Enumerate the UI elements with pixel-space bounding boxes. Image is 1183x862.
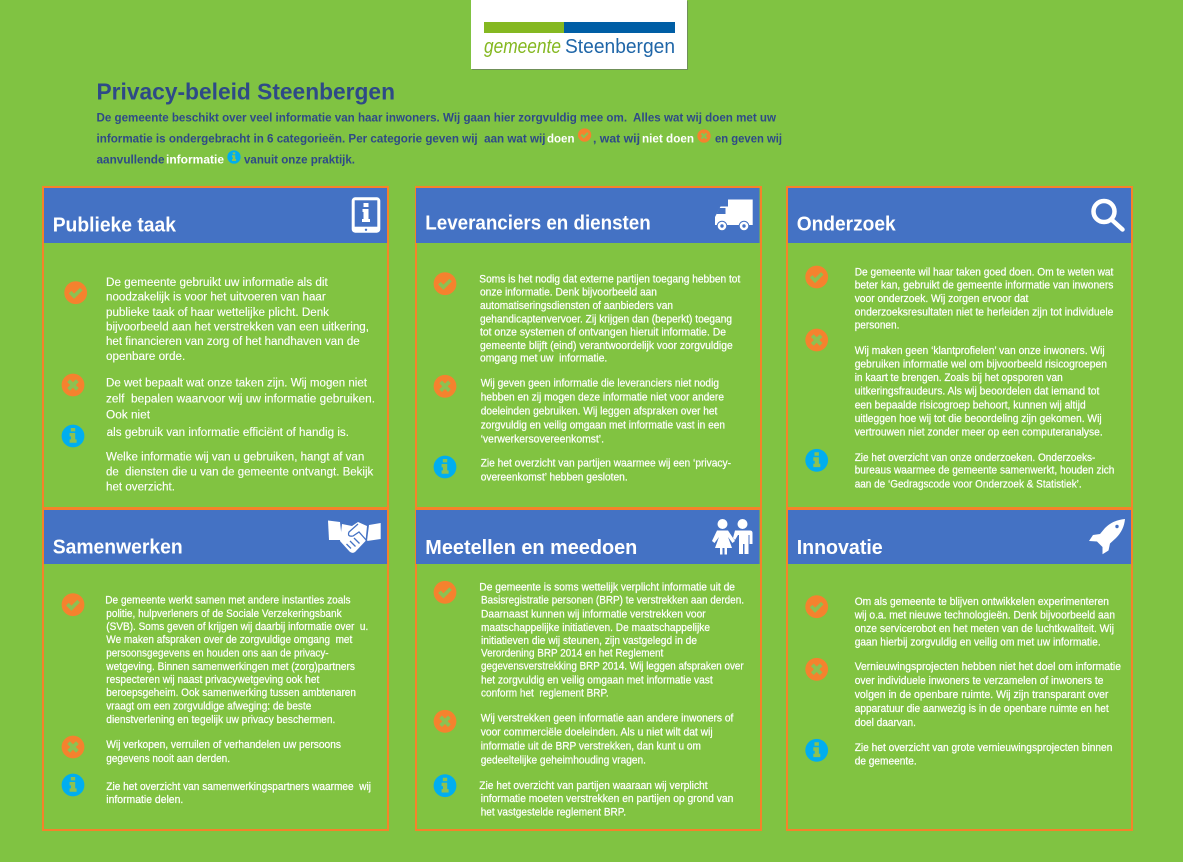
intro text: en geven wij: [715, 132, 782, 146]
text: what we do: De gemeente is soms wettelijk verplicht informatie uit de: [479, 582, 735, 594]
heading: Publieke taak: Publieke taak: [53, 214, 177, 237]
text: information: Zie het overzicht van samenwerkingspartners waarmee wij: [106, 781, 371, 793]
icon: cross: [62, 736, 84, 758]
icon: check: [434, 272, 456, 295]
text: what we do: respecteren wij naast privacywetgeving ook het: [106, 674, 319, 686]
logo card: Steenbergen: [565, 36, 675, 58]
text: information: overeenkomst’ hebben gesloten.: [481, 472, 628, 484]
text: information: [106, 452, 374, 494]
text: information: [106, 781, 371, 806]
text: what we do: gehandicaptenvervoer. Zij krijgen dan (beperkt) toegang: [480, 313, 732, 325]
panel: Meetellen en meedoen: [416, 509, 761, 830]
text: what we do: onze servicerobot en het meten van de luchtkwaliteit. Wij: [855, 623, 1114, 635]
text: what we do: openbare orde.: [106, 351, 185, 363]
panel: Samenwerken: [43, 509, 388, 830]
intro text: vanuit onze praktijk.: [244, 153, 355, 167]
text: information: Zie het overzicht van grote vernieuwingsprojecten binnen: [855, 742, 1112, 754]
text: what we do: De gemeente werkt samen met andere instanties zoals: [105, 595, 351, 607]
text: what we do: voor onderzoek. Wij zorgen ervoor dat: [855, 293, 1028, 305]
icon: cross: [805, 658, 828, 681]
icon: people: [712, 519, 752, 554]
text: what we do not do: uitleggen hoe wij tot die beoordeling zijn gekomen. Wij: [855, 413, 1102, 425]
text: what we do: (SVB). Soms geven of krijgen wij daarbij informatie over u.: [106, 621, 368, 633]
text: what we do: [106, 277, 369, 363]
text: what we do: wetgeving. Binnen samenwerkingen met (zorg)partners: [105, 661, 355, 673]
text: what we do: vraagt om een zorgvuldige afweging: de beste: [106, 700, 311, 712]
intro text: informatie is ondergebracht in 6 categorieën. Per categorie geven wij aan wat wij: [96, 132, 546, 146]
text: what we do: De gemeente gebruikt uw informatie als dit: [106, 277, 329, 289]
icon: info: [62, 425, 84, 447]
icon: tablet info: [352, 197, 380, 233]
icon: info: [805, 739, 828, 762]
icon: info: [434, 774, 456, 797]
text: what we do not do: als gebruik van informatie efficiënt of handig is.: [107, 427, 349, 439]
text: information: het vastgestelde reglement BRP.: [481, 807, 626, 819]
text: what we do: Basisregistratie personen (BRP) te verstrekken aan derden.: [481, 595, 744, 607]
text: information: [855, 452, 1115, 491]
text: what we do: beroepsgeheim. Ook samenwerking tussen ambtenaren: [106, 687, 356, 699]
text: what we do not do: in kaart te brengen. Zoals bij het opsporen van: [855, 372, 1063, 384]
icon: truck: [715, 200, 753, 231]
text: what we do not do: [855, 345, 1107, 439]
text: what we do not do: over individuele inwoners te verzamelen of inwoners te: [855, 675, 1104, 687]
text: information: informatie delen.: [106, 794, 183, 806]
panel: Innovatie: [787, 509, 1132, 830]
text: what we do not do: hebben en zij mogen deze informatie niet voor andere: [481, 392, 724, 404]
text: what we do not do: [106, 378, 375, 439]
text: what we do not do: [106, 739, 341, 765]
icon: check: [805, 595, 828, 618]
text: information: het overzicht.: [106, 482, 175, 494]
text: what we do not do: Wij verstrekken geen informatie aan andere inwoners of: [481, 713, 733, 725]
text: information: Zie het overzicht van partijen waaraan wij verplicht: [479, 780, 708, 792]
text: what we do: het financieren van zorg of het handhaven van de: [106, 336, 360, 348]
icon: magnifier: [1094, 201, 1122, 230]
text: what we do: bijvoorbeeld aan het verstrekken van een uitkering,: [106, 322, 369, 334]
intro text: niet doen: [642, 132, 694, 146]
text: what we do: We maken afspraken over de zorgvuldige omgang met: [106, 634, 352, 646]
text: what we do not do: De wet bepaalt wat onze taken zijn. Wij mogen niet: [106, 378, 368, 390]
text: what we do: automatiseringsdiensten of aanbieders van: [480, 300, 673, 312]
text: what we do: gaan hierbij zorgvuldig en veilig om met uw informatie.: [855, 636, 1101, 648]
logo card: gemeente: [484, 36, 561, 58]
text: what we do not do: Wij geven geen informatie die leveranciers niet nodig: [481, 378, 719, 390]
text: what we do not do: Ook niet: [106, 410, 151, 422]
icon: rocket: [1089, 519, 1125, 554]
text: information: aan de ‘Gedragscode voor Onderzoek & Statistiek’.: [855, 479, 1082, 491]
text: what we do not do: gegevens nooit aan derden.: [106, 753, 230, 765]
text: what we do: tot onze systemen of ontvangen hieruit informatie. De: [480, 327, 726, 339]
icon: check: [62, 593, 84, 616]
panel: Publieke taak: [43, 187, 388, 508]
text: information: Zie het overzicht van onze onderzoeken. Onderzoeks-: [855, 452, 1096, 464]
text: what we do not do: doel daarvan.: [855, 717, 916, 729]
title: Privacy-beleid Steenbergen: [96, 78, 395, 104]
text: what we do not do: vertrouwen niet zonder meer op een computeranalyse.: [855, 427, 1103, 439]
text: what we do: onze informatie. Denk bijvoorbeeld aan: [480, 287, 657, 299]
text: what we do not do: uitkeringsfraudeurs. Als wij beoordelen dat iemand tot: [855, 386, 1099, 398]
text: what we do: Verordening BRP 2014 en het Reglement: [481, 648, 663, 660]
text: information: de gemeente.: [855, 755, 917, 767]
text: what we do: conform het reglement BRP.: [481, 688, 609, 700]
text: what we do: Om als gemeente te blijven ontwikkelen experimenteren: [855, 596, 1109, 608]
text: what we do not do: doeleinden gebruiken. Wij leggen afspraken over het: [481, 406, 717, 418]
icon: cross: [62, 374, 84, 396]
text: what we do not do: [855, 661, 1121, 729]
text: what we do: De gemeente wil haar taken goed doen. Om te weten wat: [855, 267, 1113, 279]
text: what we do: gegevensverstrekking BRP 2014. Wij leggen afspraken over: [481, 661, 744, 673]
icon: cross: [434, 375, 456, 398]
text: what we do: [105, 595, 368, 726]
heading: Samenwerken: Samenwerken: [53, 535, 183, 558]
text: what we do not do: informatie uit de BRP verstrekken, dan kunt u om: [481, 741, 701, 753]
text: what we do: maatschappelijke initiatieven. De maatschappelijke: [481, 622, 710, 634]
intro text: aanvullende: [96, 153, 165, 167]
intro text: De gemeente beschikt over veel informatie van haar inwoners. Wij gaan hier zorgvuldig mee om. Alles wat wij doen met uw: [96, 111, 777, 125]
text: what we do: [855, 267, 1113, 332]
text: what we do not do: ‘verwerkersovereenkomst’.: [481, 434, 604, 446]
text: what we do not do: voor commerciële doeleinden. Als u niet wilt dat wij: [481, 727, 713, 739]
intro text: informatie: [166, 153, 224, 167]
text: what we do not do: volgen in de openbare ruimte. Wij zijn transparant over: [855, 689, 1109, 701]
text: what we do: onderzoeksresultaten niet te herleiden zijn tot individuele: [855, 306, 1113, 318]
text: information: Zie het overzicht van partijen waarmee wij een ‘privacy-: [481, 458, 731, 470]
text: what we do not do: een bepaalde risicogroep behoort, kunnen wij altijd: [855, 400, 1086, 412]
icon: info: [62, 774, 84, 796]
icon: info: [434, 456, 456, 478]
intro text: , wat wij: [593, 132, 640, 146]
icon: info: [805, 449, 828, 472]
text: what we do: personen.: [855, 320, 899, 332]
logo card: [471, 0, 688, 70]
icon: check: [805, 266, 828, 288]
heading: Innovatie: Innovatie: [797, 536, 883, 559]
text: what we do not do: Vernieuwingsprojecten hebben niet het doel om informatie: [855, 661, 1121, 673]
heading: Onderzoek: Onderzoek: [797, 213, 896, 236]
text: what we do not do: zorgvuldig en veilig omgaan met informatie vast in een: [481, 420, 725, 432]
text: what we do: noodzakelijk is voor het uitvoeren van haar: [106, 292, 326, 304]
icon: cross: [434, 710, 456, 733]
text: what we do: initiatieven die wij steunen, zijn vastgelegd in de: [481, 635, 697, 647]
text: information: bureaus waarmee de gemeente samenwerkt, houden zich: [855, 465, 1115, 477]
text: what we do not do: gebruiken informatie wel om bijvoorbeeld risicogroepen: [855, 359, 1107, 371]
panel: Onderzoek: [787, 187, 1132, 508]
text: what we do not do: Wij verkopen, verruilen of verhandelen uw persoons: [106, 739, 341, 751]
text: what we do not do: gedeeltelijke geheimhouding vragen.: [481, 755, 646, 767]
text: what we do: Daarnaast kunnen wij informatie verstrekken voor: [481, 609, 706, 621]
text: what we do: omgang met uw informatie.: [480, 353, 607, 365]
text: what we do: [854, 596, 1115, 648]
text: what we do: politie, hulpverleners of de Sociale Verzekeringsbank: [106, 608, 342, 620]
text: what we do: publieke taak of haar wettelijke plicht. Denk: [106, 307, 329, 319]
text: what we do not do: [481, 378, 725, 446]
icon: cross: [805, 329, 828, 351]
text: what we do: [479, 274, 740, 365]
text: information: informatie moeten verstrekken en partijen op grond van: [481, 793, 733, 805]
panel: Leveranciers en diensten: [416, 187, 761, 508]
text: information: [855, 742, 1112, 767]
icon: check: [434, 581, 456, 604]
heading: Leveranciers en diensten: Leveranciers en diensten: [425, 211, 651, 234]
text: what we do: beter kan, gebruikt de gemeente informatie van inwoners: [855, 280, 1113, 292]
intro text: doen: [547, 132, 574, 146]
text: what we do not do: apparatuur die aanwezig is in de openbare ruimte en het: [855, 703, 1109, 715]
text: what we do: persoonsgegevens en houden ons aan de privacy-: [106, 648, 329, 660]
text: information: Welke informatie wij van u gebruiken, hangt af van: [106, 452, 364, 464]
text: what we do: wij o.a. met nieuwe technologieën. Denk bijvoorbeeld aan: [854, 610, 1115, 622]
text: information: [479, 780, 733, 819]
heading: Meetellen en meedoen: Meetellen en meedoen: [425, 536, 637, 559]
text: what we do not do: Wij maken geen ‘klantprofielen’ van onze inwoners. Wij: [855, 345, 1105, 357]
text: what we do not do: [481, 713, 733, 767]
text: information: [481, 458, 731, 484]
text: what we do: dienstverlening en tegelijk uw privacy beschermen.: [106, 714, 335, 726]
icon: handshake: [328, 520, 381, 553]
text: what we do not do: zelf bepalen waarvoor wij uw informatie gebruiken.: [106, 394, 375, 406]
text: information: de diensten die u van de gemeente ontvangt. Bekijk: [106, 467, 374, 479]
text: what we do: gemeente blijft (eind) verantwoordelijk voor zorgvuldige: [480, 340, 733, 352]
text: what we do: [479, 582, 744, 700]
text: what we do: het zorgvuldig en veilig omgaan met informatie vast: [481, 675, 713, 687]
icon: check: [64, 281, 87, 304]
text: what we do: Soms is het nodig dat externe partijen toegang hebben tot: [479, 274, 740, 286]
intro text: [96, 111, 782, 167]
